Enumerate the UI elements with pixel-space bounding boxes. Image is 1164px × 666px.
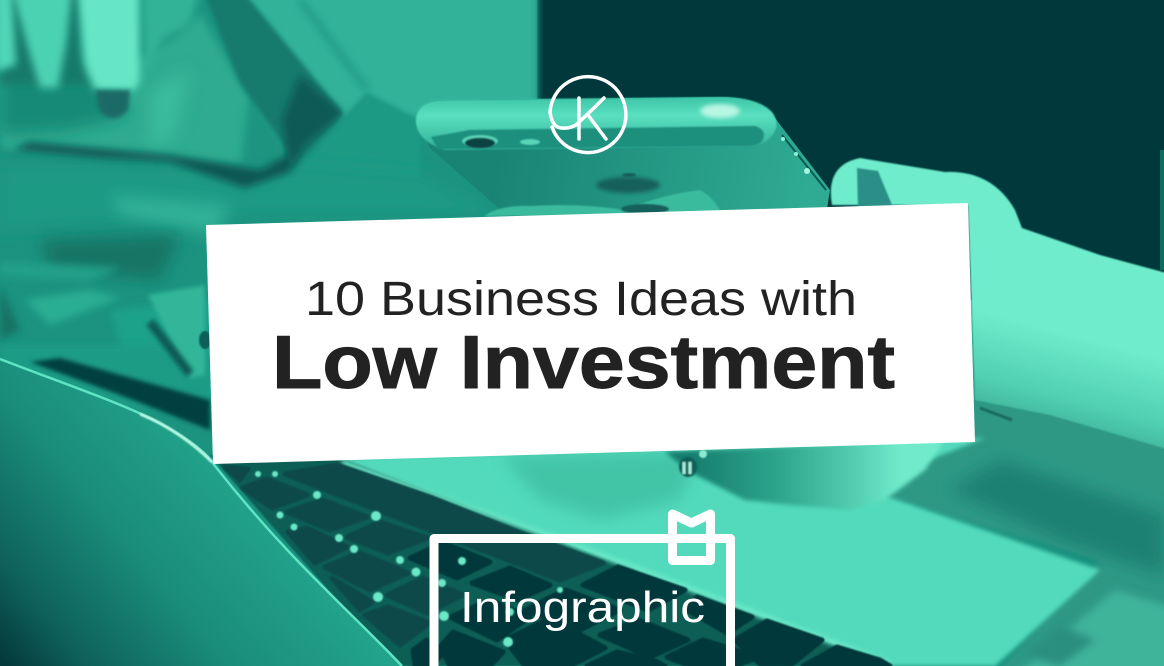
left hand [0,13,283,167]
logo: circled JK monogram [550,77,626,153]
laptop lid [0,358,402,666]
white title banner [206,203,975,464]
sleeve fold [203,0,343,168]
dark top right backdrop [537,0,1164,300]
desk soft tones [0,165,500,230]
phone body [416,97,830,218]
ring on finger [679,450,707,477]
phone side buttons [782,135,826,190]
blurred table and hand on the right [860,390,1164,666]
heading line 1: 10 Business Ideas with [305,273,857,326]
small object on desk [148,285,205,378]
dark thumbnail [857,168,892,208]
phone rim [416,97,777,150]
keyboard [210,455,892,666]
keycaps [225,465,603,645]
shadow under the hand [12,142,296,188]
fingers top left [0,0,88,85]
bright key gaps [255,471,563,647]
bright palm rest edge [342,462,890,664]
sleeve top [205,0,537,120]
infographic frame with label [434,514,730,666]
label: Infographic: Infographic [460,583,705,632]
dark fingernail [95,90,130,118]
apple logo [596,177,660,193]
fingers beneath the banner [665,440,945,510]
icon: bookmark ribbon [672,514,710,560]
dark keys behind laptop lid [30,358,210,430]
palm rest and trackpad [340,438,1100,666]
heading line 2: Low Investment [272,320,895,404]
phone camera strip [431,126,764,149]
fingertips under phone [484,190,722,216]
